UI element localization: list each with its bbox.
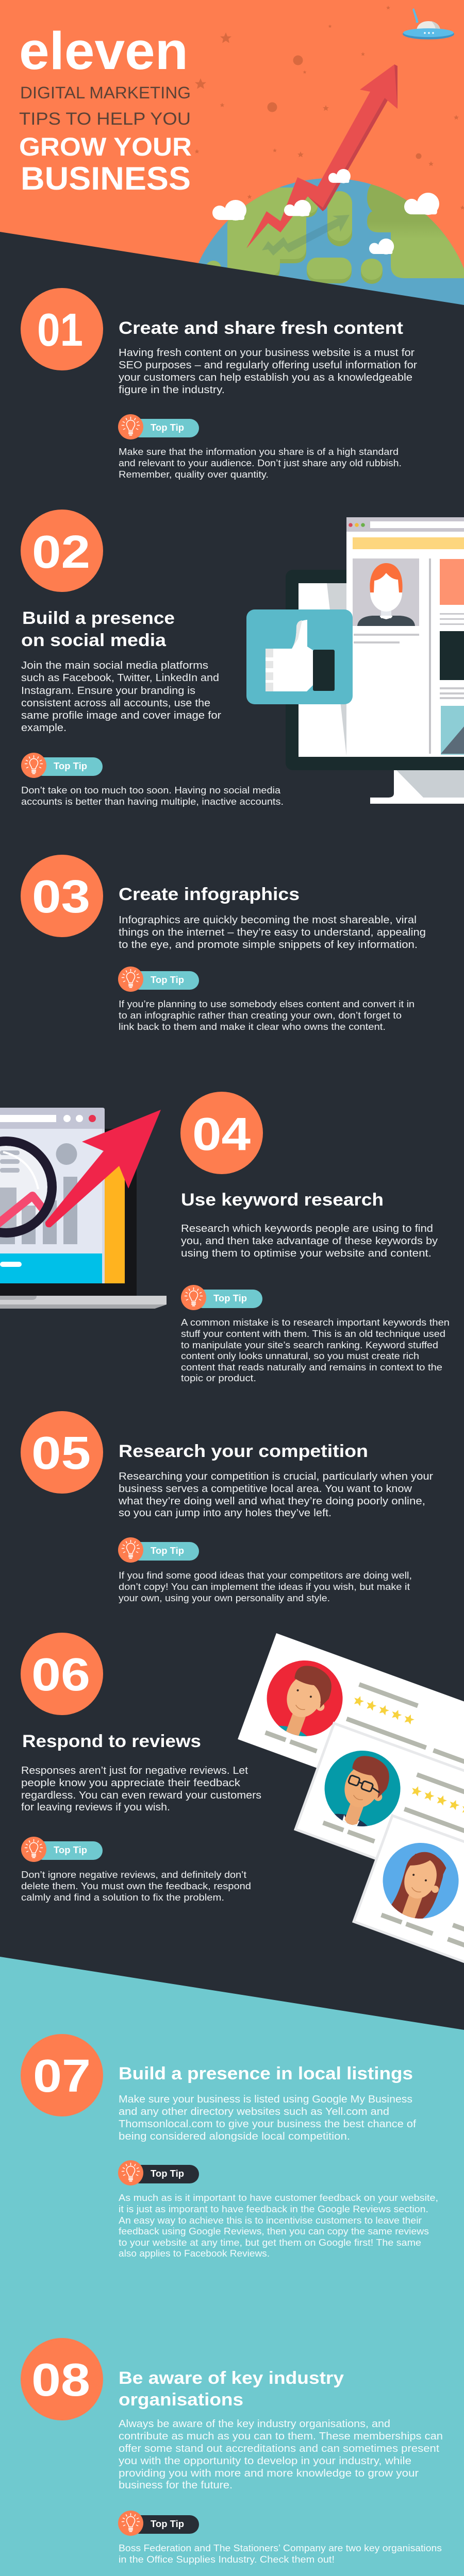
heading: Be aware of key industry [119,2368,344,2388]
number 06: 06 [31,1649,90,1701]
tip text: As much as is it important to have customer feedback on your website, [119,2193,438,2203]
decorative stars and planets [195,6,464,210]
icon: thumbs up [246,609,353,704]
tip text: stuff your content with them. This is an old technique used [181,1329,445,1339]
tip text [119,1570,412,1603]
tip text: Remember, quality over quantity. [119,469,269,480]
heading [119,2368,344,2410]
top tip badge: Top Tip [54,761,87,771]
number 03: 03 [32,871,90,923]
body text [118,1471,433,1519]
heading [21,608,175,650]
top tip badge [181,1285,262,1310]
top tip badge [118,2160,199,2185]
tip text: accounts is better than having multiple, inactive accounts. [21,796,284,807]
tip text [21,1870,251,1903]
body text: your customers can help establish you as a knowledgeable [119,372,412,383]
tip text [119,447,402,480]
tip text [21,785,284,807]
body text: Researching your competition is crucial, particularly when your [119,1471,433,1482]
tip text: Don’t take on too much too soon. Having no social media [21,785,281,795]
body text: figure in the industry. [119,384,225,396]
tip text: and relevant to your audience. Don’t just share any old rubbish. [119,458,402,468]
body text: what they’re doing well and what they’re doing poorly online, [118,1496,425,1507]
top tip badge: Top Tip [151,2519,184,2529]
body text [119,347,417,396]
tip text: your own, using your own personality and style. [119,1593,330,1603]
body text: consistent across all accounts, use the [21,698,210,709]
panel: teal section background [0,1957,464,2576]
tip text: to your website at any time, but get them on Google first! The same [119,2238,421,2248]
body text: people know you appreciate their feedback [21,1777,241,1789]
body text: Instagram. Ensure your branding is [21,685,195,697]
panel: tip 07 [21,2034,438,2259]
body text: Thomsonlocal.com to give your business the best chance of [119,2119,416,2130]
review card 3 [352,1814,464,1963]
heading: Respond to reviews [22,1732,201,1751]
tip text [119,2193,438,2259]
heading: organisations [119,2390,243,2410]
panel: tip 03 [21,855,426,1032]
tip text: to an infographic rather than creating your own, don’t forget to [119,1010,402,1021]
number 04: 04 [192,1109,251,1160]
body text: you with the opportunity to develop in your industry, while [119,2455,411,2467]
title: eleven [19,21,188,80]
heading: Build a presence [22,608,175,628]
body text: Make sure your business is listed using Google My Business [119,2094,412,2105]
top tip badge: Top Tip [151,2168,184,2179]
tip text: to manipulate your site’s search ranking. Keyword stuffed [181,1340,438,1350]
title: TIPS TO HELP YOU [19,109,191,129]
body text [119,2094,416,2142]
top tip badge [118,1537,199,1563]
tip text: it is just as imporant to have feedback in the Google Reviews section. [119,2204,428,2214]
body text: business for the future. [119,2480,233,2491]
top tip badge [118,967,199,992]
tip text [181,1317,450,1383]
tip text: link back to them and make it clear who owns the content. [119,1022,386,1032]
tip text: calmly and find a solution to fix the problem. [21,1892,224,1903]
tip text: If you’re planning to use somebody elses content and convert it in [119,999,415,1009]
top tip badge: Top Tip [151,1546,184,1556]
body text: and any other directory websites such as Yell.com and [119,2106,389,2117]
body text: Join the main social media platforms [21,660,208,671]
illustration: globe [198,178,464,305]
icon: clouds [212,169,439,255]
number 07: 07 [33,2050,91,2102]
body text: offer some stand out accreditations and can sometimes present [119,2443,439,2454]
body text: business serves a competitive local area. You want to know [119,1483,412,1495]
body text: Research which keywords people are using to find [181,1223,433,1234]
title: GROW YOUR [19,132,192,161]
body text: Always be aware of the key industry organisations, and [119,2418,390,2430]
review card 2 [294,1722,464,1860]
top tip badge [21,1837,103,1862]
tip text: Boss Federation and The Stationers’ Company are two key organisations [119,2543,442,2553]
top tip badge: Top Tip [151,975,184,985]
body text: same profile image and cover image for [21,710,221,721]
arrow: rising growth arrow [246,64,397,248]
tip text: A common mistake is to research important keywords then [181,1317,450,1328]
body text [181,1223,438,1259]
title: BUSINESS [21,161,191,197]
body text: such as Facebook, Twitter, LinkedIn and [21,672,219,684]
body text: to the eye, and promote simple snippets of key information. [119,939,418,951]
body text: SEO purposes – and regularly offering useful information for [119,360,417,371]
panel: tip 02 [21,510,284,807]
number 01: 01 [37,304,83,356]
body text: Having fresh content on your business website is a must for [119,347,415,359]
body text: you, and then take advantage of these keywords by [181,1235,438,1247]
tip text: If you find some good ideas that your competitors are doing well, [119,1570,412,1581]
heading: Create and share fresh content [119,318,403,338]
body text [119,914,426,951]
tip text [119,999,415,1032]
icon: flying saucer [403,8,454,39]
panel: tip 05 [21,1411,433,1603]
tip text: feedback using Google Reviews, then you can copy the same reviews [119,2226,429,2236]
body text: using them to optimise your website and content. [181,1248,432,1259]
title: DIGITAL MARKETING [20,83,191,102]
tip text [119,2543,442,2565]
panel: orange header background [0,0,464,319]
body text: so you can jump into any holes they’ve left. [119,1507,332,1519]
illustration: customer review cards [238,1633,464,1963]
tip text: content only looks unnatural, so you must create rich [181,1351,419,1361]
tip text: Make sure that the information you share is of a high standard [119,447,399,457]
body text [21,1765,261,1813]
illustration: social media monitor [286,517,464,804]
body text [119,2418,443,2491]
body text [21,660,221,734]
heading: on social media [21,631,167,650]
tip text: also applies to Facebook Reviews. [119,2248,270,2259]
tip text: An easy way to achieve this is to incentivise customers to leave their [119,2215,422,2226]
number 05: 05 [31,1428,91,1479]
tip text: Don’t ignore negative reviews, and definitely don’t [21,1870,246,1880]
panel: tip 08 [21,2338,443,2565]
heading: Build a presence in local listings [119,2064,413,2083]
panel: tip 06 [21,1633,261,1903]
body text: for leaving reviews if you wish. [21,1802,170,1813]
illustration: keyword research laptop [0,1108,167,1309]
panel: tip 04 [180,1092,450,1383]
top tip badge: Top Tip [151,422,184,433]
body text: example. [21,722,67,734]
tip text: topic or product. [181,1373,256,1383]
heading: Create infographics [119,885,300,904]
review card 1 [238,1633,464,1769]
tip text: in the Office Supplies Industry. Check them out! [119,2554,335,2565]
number 02: 02 [32,527,90,578]
body text: being considered alongside local competition. [119,2131,350,2142]
top tip badge: Top Tip [54,1845,87,1855]
body text: providing you with more and more knowledge to grow your [119,2468,419,2479]
number 08: 08 [31,2354,90,2406]
panel: dark section background [0,232,464,2030]
heading: Use keyword research [181,1190,384,1210]
title [19,21,192,197]
top tip badge [21,753,103,778]
tip text: delete them. You must own the feedback, respond [21,1881,251,1891]
top tip badge [118,414,199,439]
body text: things on the internet – they’re easy to understand, appealing [119,927,426,938]
tip text: content that reads naturally and remains in context to the [181,1362,442,1372]
body text: regardless. You can even reward your customers [21,1790,261,1801]
body text: contribute as much as you can to them. These memberships can [119,2431,443,2442]
top tip badge [118,2511,199,2536]
top tip badge: Top Tip [213,1293,247,1303]
body text: Infographics are quickly becoming the most shareable, viral [119,914,417,926]
panel: tip 01 [21,288,417,480]
tip text: don’t copy! You can implement the ideas if you wish, but make it [119,1582,410,1592]
heading: Research your competition [119,1442,368,1461]
body text: Responses aren’t just for negative reviews. Let [21,1765,248,1776]
